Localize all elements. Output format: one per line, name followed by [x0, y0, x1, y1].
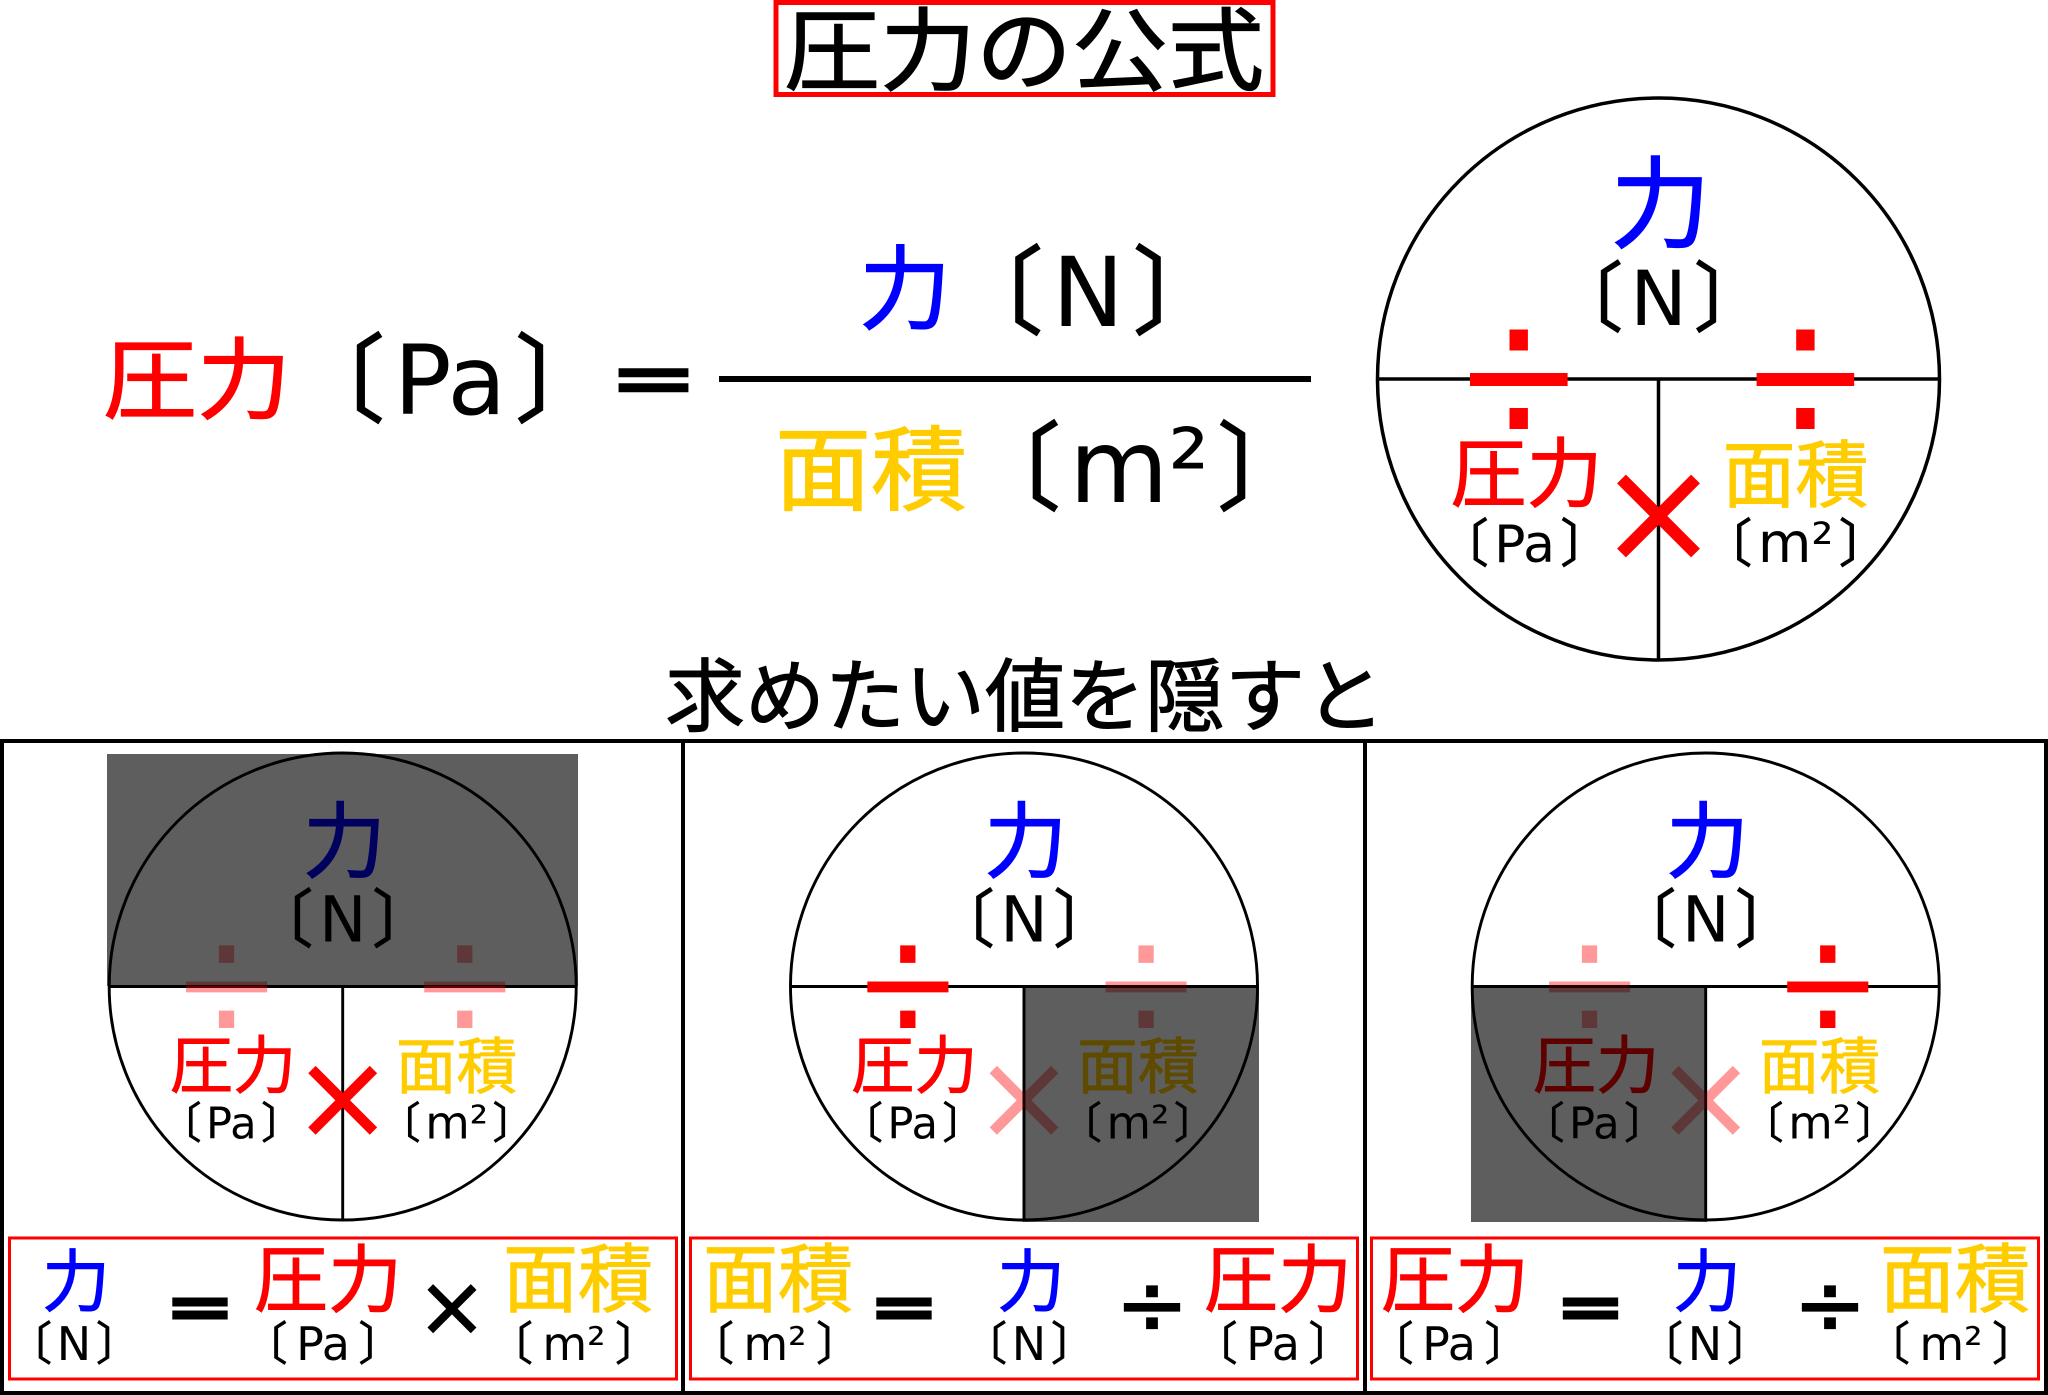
circle diagram: 面積	[396, 1033, 517, 1103]
circle diagram: 〔m²〕	[1740, 1097, 1899, 1150]
multiply sign	[1622, 479, 1696, 553]
panel frames	[2, 741, 2046, 1393]
result equation: area: 〔Pa〕	[1192, 1317, 1354, 1371]
circle diagram: 圧力	[1533, 1029, 1659, 1103]
result equation: area: 圧力	[1204, 1238, 1352, 1324]
result equation: area: ÷	[1115, 1253, 1189, 1356]
circle diagram: 〔N〕	[250, 883, 435, 957]
circle diagram: 〔N〕	[932, 883, 1116, 957]
large formula circle: 〔m²〕	[1700, 511, 1891, 575]
result equation: force: 〔N〕	[6, 1317, 142, 1371]
result equation: area: 力	[997, 1244, 1065, 1323]
result equation: pressure: ＝	[1557, 1277, 1624, 1344]
result equation: area: ＝	[870, 1277, 938, 1344]
result equation: area	[688, 1236, 1358, 1379]
result equation: area: 〔N〕	[961, 1317, 1097, 1371]
circle diagram: 〔m²〕	[377, 1097, 536, 1150]
result equation: force	[6, 1236, 676, 1379]
dark cover over pressure	[1471, 985, 1707, 1222]
circle diagram: 力	[984, 794, 1067, 891]
circle diagram: 〔Pa〕	[159, 1100, 304, 1150]
circle diagram	[109, 753, 576, 1220]
title: 圧力の公式	[784, 0, 1264, 104]
circle diagram	[1472, 753, 1939, 1220]
result equation: force: 面積	[503, 1236, 653, 1324]
circle diagram: 圧力	[851, 1029, 977, 1103]
large formula circle	[1378, 98, 1940, 660]
result equation: force: ＝	[166, 1277, 234, 1344]
circle diagram: 力	[1666, 794, 1749, 891]
result equation: force: ×	[417, 1257, 487, 1355]
denominator: area: 面積	[775, 419, 967, 526]
divide sign right	[1757, 330, 1854, 429]
result equation: pressure: 〔m²〕	[1864, 1317, 2038, 1371]
large formula circle: 面積	[1722, 434, 1868, 519]
result equation: force: 〔Pa〕	[242, 1317, 404, 1371]
unit: Pa: 〔Pa〕	[289, 325, 611, 437]
result equation: pressure: 〔N〕	[1637, 1317, 1773, 1371]
result equation: pressure: 〔Pa〕	[1368, 1317, 1530, 1371]
result equation: area: 面積	[703, 1236, 853, 1324]
result equation: pressure: 面積	[1880, 1236, 2030, 1324]
circle diagram: 力	[303, 794, 386, 891]
large formula circle: 〔Pa〕	[1437, 515, 1612, 575]
large formula circle: 〔N〕	[1547, 254, 1770, 343]
circle diagram: 〔m²〕	[1059, 1097, 1217, 1150]
circle diagram: 圧力	[170, 1029, 296, 1103]
panel: hide force	[6, 753, 676, 1379]
circle diagram: 〔Pa〕	[840, 1100, 985, 1150]
circle diagram: 〔N〕	[1613, 883, 1798, 957]
circle diagram: 〔Pa〕	[1522, 1100, 1667, 1150]
result equation: force: 〔m²〕	[487, 1317, 661, 1371]
result equation: pressure: 圧力	[1381, 1238, 1529, 1324]
circle diagram: 面積	[1759, 1033, 1880, 1103]
subheading: 求めたい値を隠すと	[665, 651, 1385, 744]
circle diagram	[790, 753, 1258, 1220]
unit: N: 〔N〕	[947, 237, 1229, 349]
result equation: pressure	[1368, 1236, 2038, 1379]
dark cover over force	[107, 754, 578, 986]
circle diagram: 面積	[1077, 1033, 1199, 1103]
result equation: pressure: ÷	[1793, 1253, 1867, 1356]
numerator: force: 力	[859, 237, 951, 344]
formula: pressure: 圧力	[103, 329, 291, 433]
panel: hide pressure	[1368, 753, 2038, 1379]
result equation: force: 力	[42, 1244, 110, 1323]
divide sign left	[1470, 330, 1568, 429]
large formula circle: 力	[1610, 147, 1710, 264]
result equation: pressure: 力	[1673, 1244, 1741, 1323]
large formula circle: 圧力	[1450, 430, 1602, 519]
panel: hide area	[688, 753, 1358, 1379]
result equation: area: 〔m²〕	[688, 1317, 862, 1371]
fraction line	[719, 376, 1311, 382]
main formula	[103, 237, 1313, 527]
equals sign: ＝	[610, 345, 697, 422]
dark cover over area	[1022, 985, 1259, 1222]
result equation: force: 圧力	[254, 1238, 402, 1324]
unit: m²: 〔m²〕	[965, 408, 1313, 527]
